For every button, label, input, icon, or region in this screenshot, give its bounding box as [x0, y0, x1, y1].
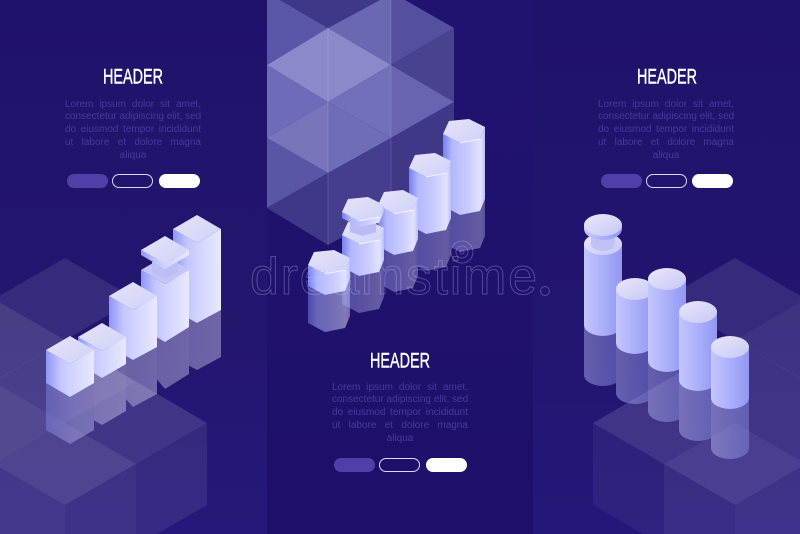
cylinder 5	[711, 336, 749, 409]
hex bar 3	[378, 190, 418, 255]
bar 2	[78, 323, 126, 378]
text block: right: ut labore et dolore magna	[598, 137, 734, 148]
reflections of hex bars	[342, 199, 485, 313]
text block: center	[332, 382, 468, 444]
buttons: center	[334, 458, 467, 472]
hex bar 5	[443, 119, 485, 215]
text block: left: do eiusmod tempor incididunt	[65, 124, 201, 135]
bar 4 with floating cap	[141, 236, 189, 342]
text block: right: do eiusmod tempor incididunt	[598, 124, 734, 135]
heading: right: HEADER	[637, 66, 697, 88]
heading: center: HEADER	[370, 350, 430, 372]
text block: left	[65, 98, 201, 161]
text block: center: aliqua	[387, 433, 413, 444]
background isometric cube	[593, 258, 800, 534]
bar 5	[173, 215, 221, 323]
buttons: right	[601, 174, 733, 188]
panel: left	[0, 0, 267, 534]
cylinder 4	[679, 301, 717, 391]
text block: left: ut labore et dolore magna	[65, 137, 201, 148]
cylinder 1 with floating cap	[584, 214, 622, 336]
text block: center: ut labore et dolore magna	[332, 420, 468, 431]
text block: right	[598, 98, 734, 161]
text block: right: aliqua	[653, 150, 679, 161]
panel: center	[267, 0, 533, 534]
bar 3	[109, 282, 157, 360]
cylinder 2	[616, 278, 654, 354]
text block: left: aliqua	[120, 150, 146, 161]
text block: center: Lorem ipsum dolor sit amet,	[332, 382, 468, 392]
bar 1	[46, 336, 94, 397]
hex bar 1	[308, 250, 350, 295]
text block: right: Lorem ipsum dolor sit amet,	[598, 98, 734, 110]
cylinder 3	[648, 268, 686, 372]
reflection hex bar 1	[308, 279, 350, 332]
reflections of bars	[46, 310, 221, 444]
buttons: left	[67, 174, 200, 188]
hex bar 2 with floating cap	[342, 197, 384, 276]
background hexagon	[267, 0, 454, 245]
panel: right	[533, 0, 800, 534]
text block: left: consectetur adipiscing elit, sed	[65, 111, 201, 122]
text block: left: Lorem ipsum dolor sit amet,	[65, 98, 201, 110]
text block: right: consectetur adipiscing elit, sed	[598, 111, 734, 122]
heading: left: HEADER	[103, 66, 163, 88]
watermark: dreamstime	[250, 248, 537, 306]
hex bar 4	[409, 153, 451, 234]
text block: center: consectetur adipiscing elit, sed	[332, 394, 468, 405]
background isometric cube	[0, 258, 207, 534]
reflections of cylinders	[584, 325, 749, 459]
text block: center: do eiusmod tempor incididunt	[332, 407, 468, 418]
